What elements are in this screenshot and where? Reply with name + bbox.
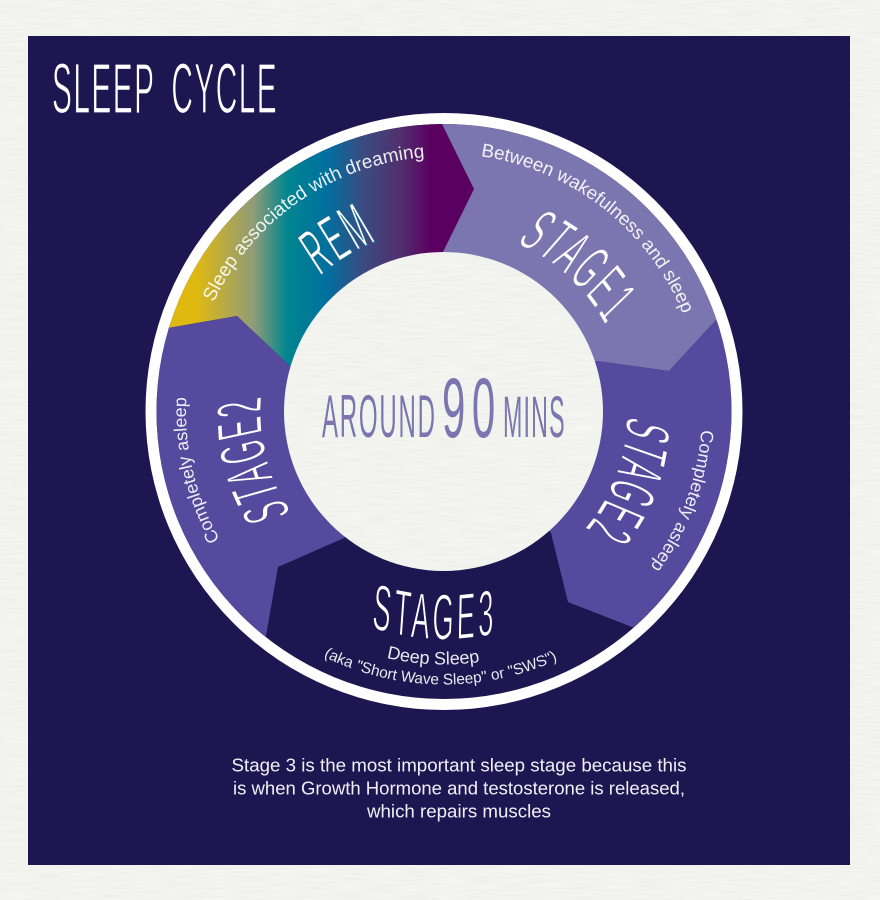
label: stage 3: STAGE3 bbox=[374, 586, 492, 640]
caption: stage 1: Between wakefulness and sleep bbox=[482, 144, 691, 312]
segment: stage 3 background bbox=[156, 124, 732, 699]
footer note: which repairs muscles bbox=[366, 800, 551, 822]
label: stage 2 left: STAGE2 bbox=[218, 398, 288, 523]
footer note bbox=[232, 754, 686, 822]
label: REM: REM bbox=[297, 203, 376, 276]
segment: stage 1 bbox=[442, 124, 716, 371]
caption: stage 2 left: Completely asleep bbox=[174, 398, 218, 543]
segment: REM bbox=[168, 124, 474, 366]
centre circle bbox=[284, 252, 604, 572]
centre label: around 90 mins bbox=[322, 362, 566, 456]
centre label: around 90 mins: AROUND bbox=[322, 383, 437, 450]
sleep cycle wheel bbox=[146, 113, 742, 710]
label: stage 1: STAGE1 bbox=[521, 212, 634, 324]
footer note: Stage 3 is the most important sleep stage because this bbox=[232, 754, 686, 776]
caption: REM: Sleep associated with dreaming bbox=[204, 146, 424, 300]
caption: deep sleep: Deep Sleep bbox=[388, 646, 479, 668]
segment: stage 2 left bbox=[156, 316, 345, 637]
caption: short wave sleep: (aka "Short Wave Sleep" or "SWS") bbox=[325, 648, 556, 686]
title: SLEEP CYCLE bbox=[52, 49, 278, 129]
centre label: around 90 mins: MINS bbox=[503, 386, 566, 450]
centre label: around 90 mins: 90 bbox=[442, 362, 502, 456]
wheel white ring bbox=[146, 113, 742, 710]
segment: stage 2 right bbox=[549, 320, 732, 628]
footer note: is when Growth Hormone and testosterone is released, bbox=[233, 778, 685, 798]
label: stage 2 right: STAGE2 bbox=[586, 419, 669, 544]
caption: stage 2 right: Completely asleep bbox=[652, 431, 714, 570]
